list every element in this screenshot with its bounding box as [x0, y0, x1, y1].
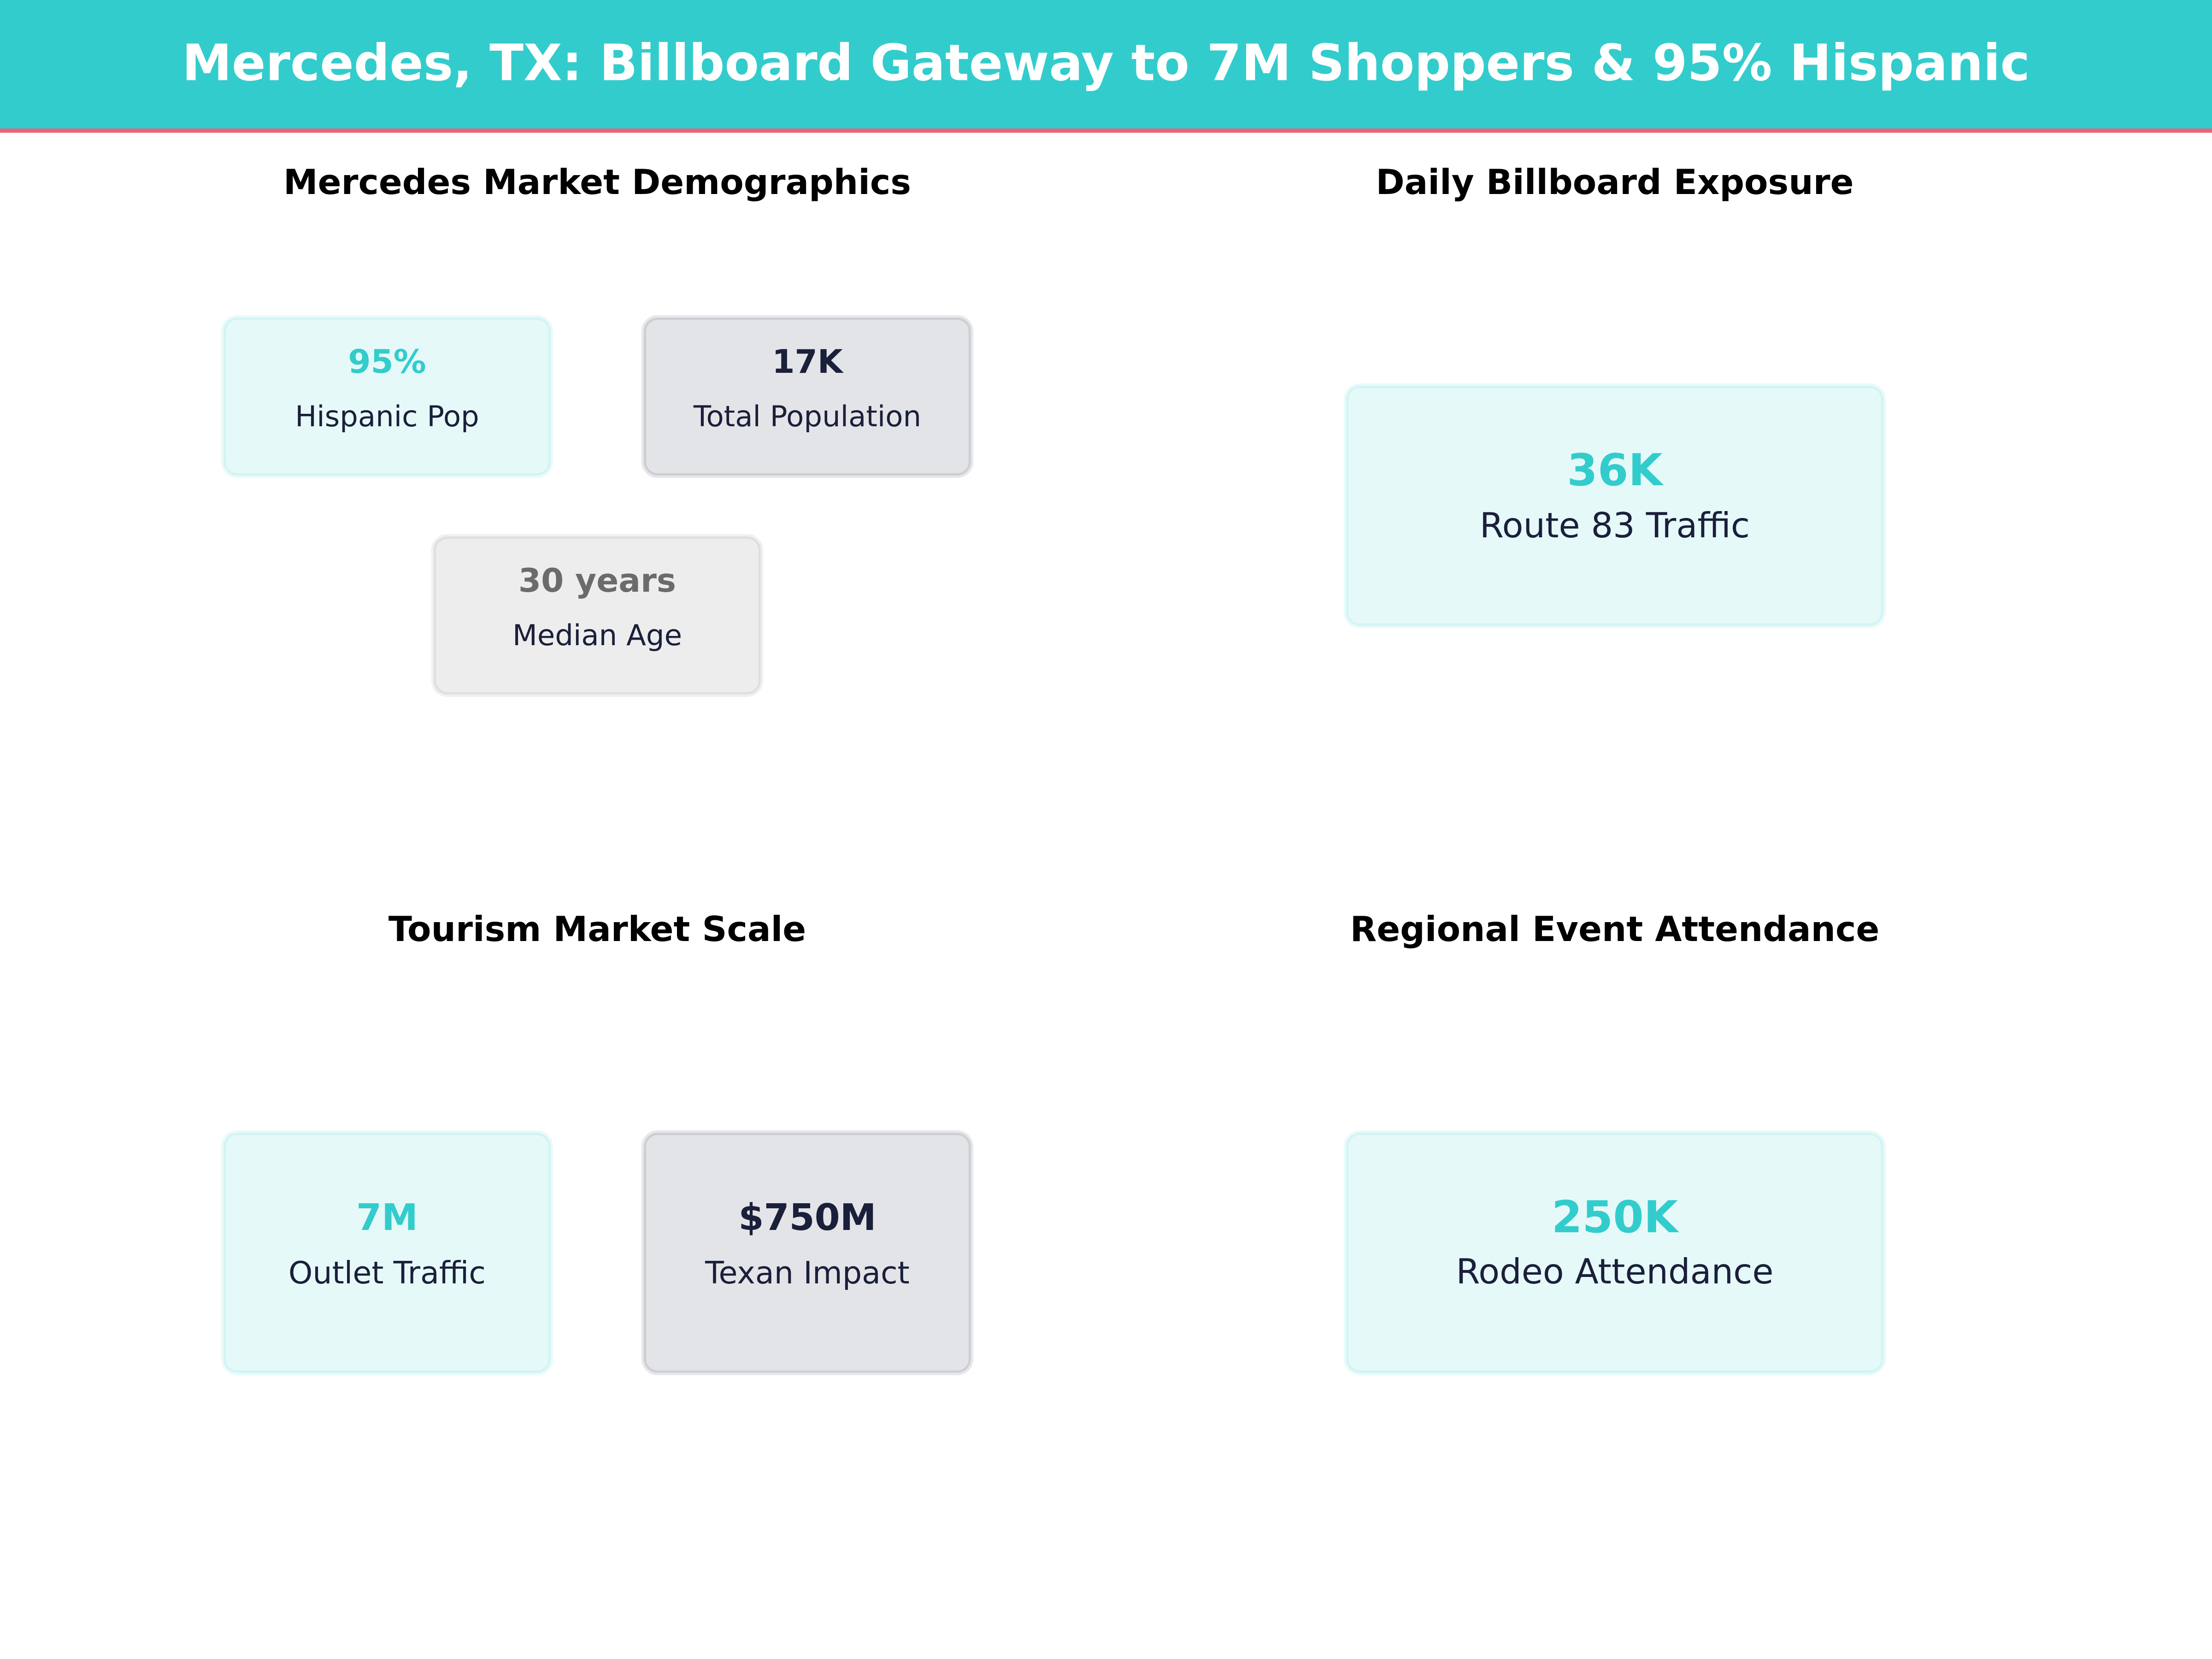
stat card: median age: Median Age — [512, 618, 682, 652]
stat card: rodeo attendance: Rodeo Attendance — [1456, 1251, 1774, 1292]
panel: Daily Billboard Exposure — [1346, 162, 1883, 626]
stat card: rodeo attendance — [1346, 1133, 1883, 1373]
stat card: Route 83 traffic — [1346, 386, 1883, 626]
stat card: outlet traffic — [224, 1133, 551, 1373]
stat card: Hispanic population — [224, 318, 551, 476]
stat card: Hispanic population: Hispanic Pop — [295, 400, 479, 433]
heading: demographics: Mercedes Market Demographics — [283, 162, 911, 202]
header banner — [0, 0, 2212, 133]
stat card: total population — [644, 318, 971, 476]
stat card: outlet traffic: Outlet Traffic — [288, 1255, 486, 1291]
stat card: total population: Total Population — [693, 400, 921, 433]
stat card: Route 83 traffic: 36K — [1567, 444, 1665, 496]
panel: Tourism Market Scale — [224, 909, 971, 1373]
stat card: outlet traffic: 7M — [356, 1196, 418, 1239]
stat card: Texan impact — [644, 1133, 971, 1373]
heading: exposure: Daily Billboard Exposure — [1376, 162, 1853, 202]
stat card: Texan impact: $750M — [738, 1196, 877, 1239]
stat card: total population: 17K — [772, 342, 844, 381]
stat card: Hispanic population: 95% — [348, 342, 426, 381]
stat card: median age — [434, 536, 761, 694]
title: Mercedes, TX: Billboard Gateway to 7M Shoppers & 95% Hispanic — [182, 34, 2030, 92]
stat card: Texan impact: Texan Impact — [705, 1255, 910, 1291]
heading: tourism: Tourism Market Scale — [388, 909, 806, 949]
stat card: rodeo attendance: 250K — [1552, 1191, 1680, 1243]
stat card: median age: 30 years — [518, 561, 676, 600]
panel: Mercedes Market Demographics — [224, 162, 971, 694]
heading: events: Regional Event Attendance — [1350, 909, 1879, 949]
panel: Regional Event Attendance — [1346, 909, 1883, 1373]
stat card: Route 83 traffic: Route 83 Traffic — [1480, 505, 1750, 546]
